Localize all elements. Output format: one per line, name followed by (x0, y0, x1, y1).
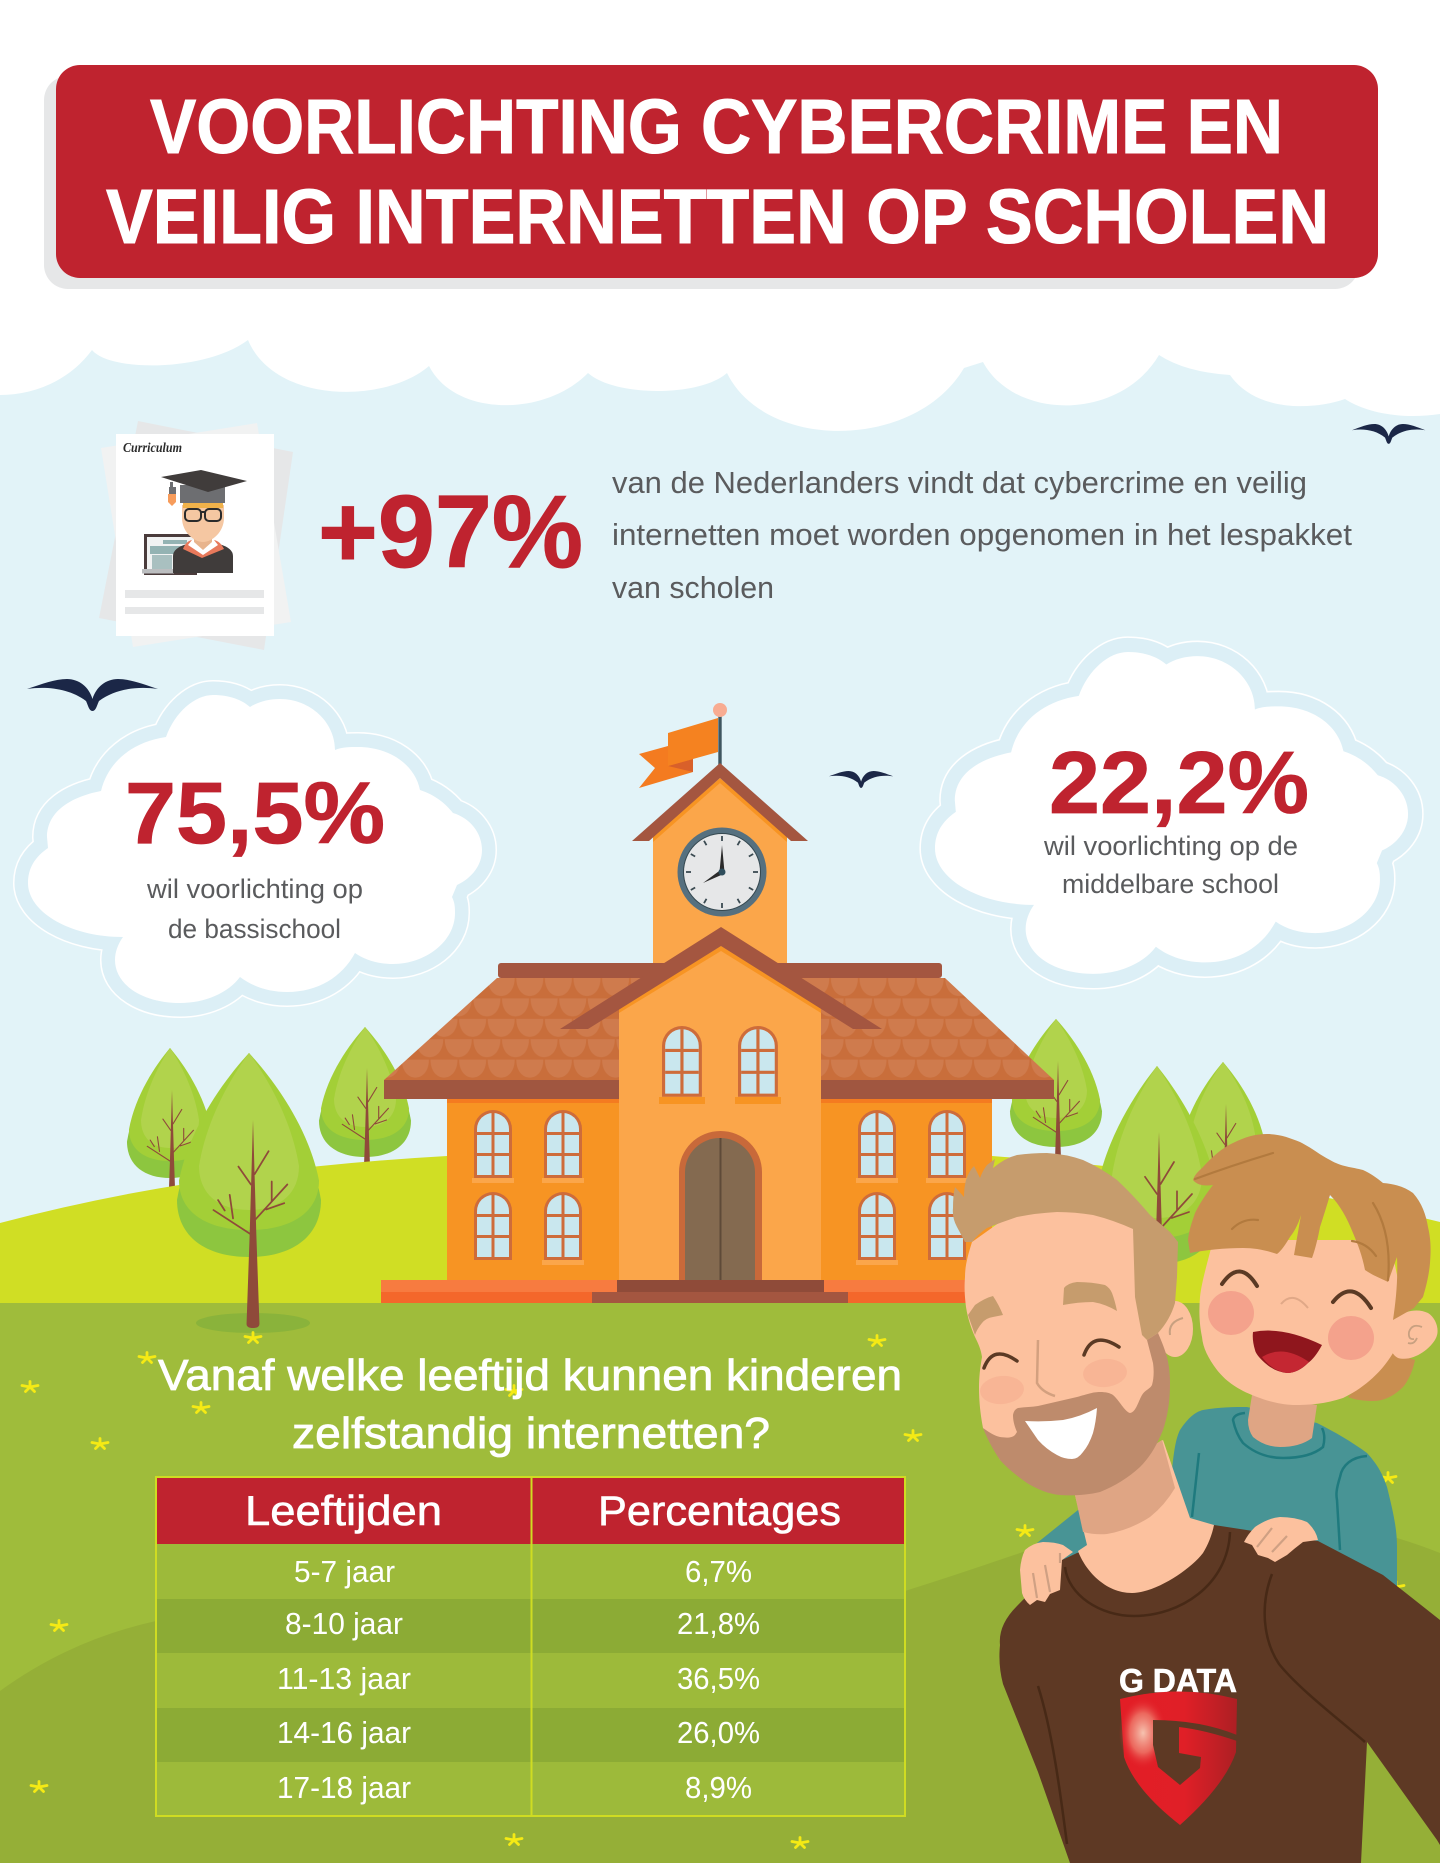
father eyes (984, 1340, 1119, 1368)
boy mouth (1253, 1331, 1322, 1373)
cloud callout: 22,2%: middelbare school (1062, 869, 1279, 899)
tower (632, 763, 808, 970)
text block: 97% description: van de Nederlanders vindt dat cybercrime en veilig (612, 465, 1307, 500)
table rows: 26,0% (677, 1715, 760, 1750)
cloud callout: 22,2%: 22,2% (1049, 733, 1309, 832)
father teeth (1025, 1408, 1097, 1459)
table heading (158, 1351, 902, 1458)
boy nose (1281, 1298, 1308, 1308)
boy tongue (1262, 1352, 1309, 1373)
table header: Leeftijden (245, 1487, 442, 1534)
illustration: boy (1037, 1134, 1438, 1600)
boy eyes (1222, 1271, 1371, 1308)
age table (156, 1477, 905, 1816)
boy back hair (1348, 1353, 1415, 1401)
father neck shadow (1075, 1440, 1175, 1534)
boy shirt lines (1192, 1413, 1367, 1550)
table header: Percentages (598, 1487, 841, 1534)
logo: G DATA: G DATA (1119, 1662, 1237, 1699)
grass (0, 1303, 1440, 1863)
father neck (1075, 1440, 1214, 1593)
table rows: 11-13 jaar (277, 1661, 411, 1696)
yellow-green hill (0, 1143, 1440, 1320)
boy hand right (1244, 1517, 1318, 1562)
table heading: Vanaf welke leeftijd kunnen kinderen (158, 1351, 902, 1400)
wings (447, 1099, 992, 1280)
icon: curriculum document with graduate: Curriculum (123, 441, 182, 456)
father ear (1157, 1301, 1193, 1357)
top cloud border (0, 0, 1440, 431)
father blush (979, 1357, 1128, 1406)
main roof (384, 963, 1054, 1099)
tree: far left (127, 1048, 213, 1220)
boy neck (1248, 1395, 1317, 1447)
cloud callout: 22,2% (935, 652, 1408, 974)
father eyebrows (968, 1282, 1117, 1335)
tree: far right small (1179, 1062, 1267, 1234)
tree: behind school right (1010, 1019, 1102, 1191)
father shirt lines (1038, 1532, 1365, 1844)
boy hand left (1020, 1542, 1073, 1605)
father nose (1037, 1340, 1055, 1396)
father face (965, 1190, 1170, 1495)
school building (381, 703, 1061, 1304)
clock (678, 828, 766, 916)
boy ear inner (1408, 1326, 1422, 1343)
boy hair (1188, 1134, 1431, 1320)
boy face (1199, 1240, 1400, 1405)
icon: bird left (27, 679, 158, 711)
cloud callout: 75,5%: 75,5% (125, 765, 385, 862)
table rows: 21,8% (677, 1606, 760, 1641)
icon: curriculum document with graduate (99, 421, 293, 650)
door (679, 1131, 762, 1280)
text block: 97% description (612, 465, 1352, 605)
father hair (953, 1153, 1178, 1340)
table heading: zelfstandig internetten? (292, 1409, 770, 1458)
sky background (0, 320, 1440, 1320)
tree: right large (1095, 1066, 1219, 1332)
decorative yellow flowers (22, 1332, 1404, 1848)
cloud callout: 75,5%: wil voorlichting op (146, 874, 363, 904)
icon: bird top right (1352, 424, 1425, 444)
title banner: VOORLICHTING CYBERCRIME EN (150, 84, 1283, 170)
cloud callout: 75,5%: de bassischool (168, 914, 341, 944)
table header (156, 1477, 905, 1544)
table rows: 5-7 jaar (294, 1554, 395, 1589)
icon: small bird centre (829, 771, 893, 788)
table rows: 14-16 jaar (277, 1715, 411, 1750)
father beard (983, 1333, 1170, 1495)
table rows: 6,7% (685, 1554, 752, 1589)
flag (639, 703, 727, 788)
boy hair lines (1195, 1153, 1389, 1280)
text block: 97% description: van scholen (612, 570, 774, 605)
illustration: father (953, 1153, 1440, 1863)
title banner: VEILIG INTERNETTEN OP SCHOLEN (106, 174, 1329, 260)
text block: 97% description: internetten moet worden opgenomen in het lespakket (612, 517, 1352, 552)
father ear inner (1170, 1318, 1183, 1335)
logo: G DATA (1119, 1662, 1237, 1825)
table rows: 8-10 jaar (285, 1606, 403, 1641)
table rows (156, 1544, 905, 1816)
darker grass hill (0, 1524, 1440, 1863)
cloud callout: 75,5% (28, 695, 482, 1003)
boy blush (1208, 1291, 1374, 1360)
stat: +97%: +97% (318, 474, 583, 589)
steps (381, 1280, 1061, 1304)
table rows: 36,5% (677, 1661, 760, 1696)
big tree left (177, 1053, 321, 1333)
central gable (560, 927, 882, 1280)
tree: behind school left (319, 1027, 411, 1198)
boy shirt (1037, 1407, 1397, 1600)
table rows: 17-18 jaar (277, 1770, 411, 1805)
cloud callout: 22,2%: wil voorlichting op de (1043, 831, 1298, 861)
table rows: 8,9% (685, 1770, 752, 1805)
title banner (44, 65, 1378, 289)
boy ear (1392, 1310, 1438, 1359)
father shirt (999, 1525, 1440, 1863)
